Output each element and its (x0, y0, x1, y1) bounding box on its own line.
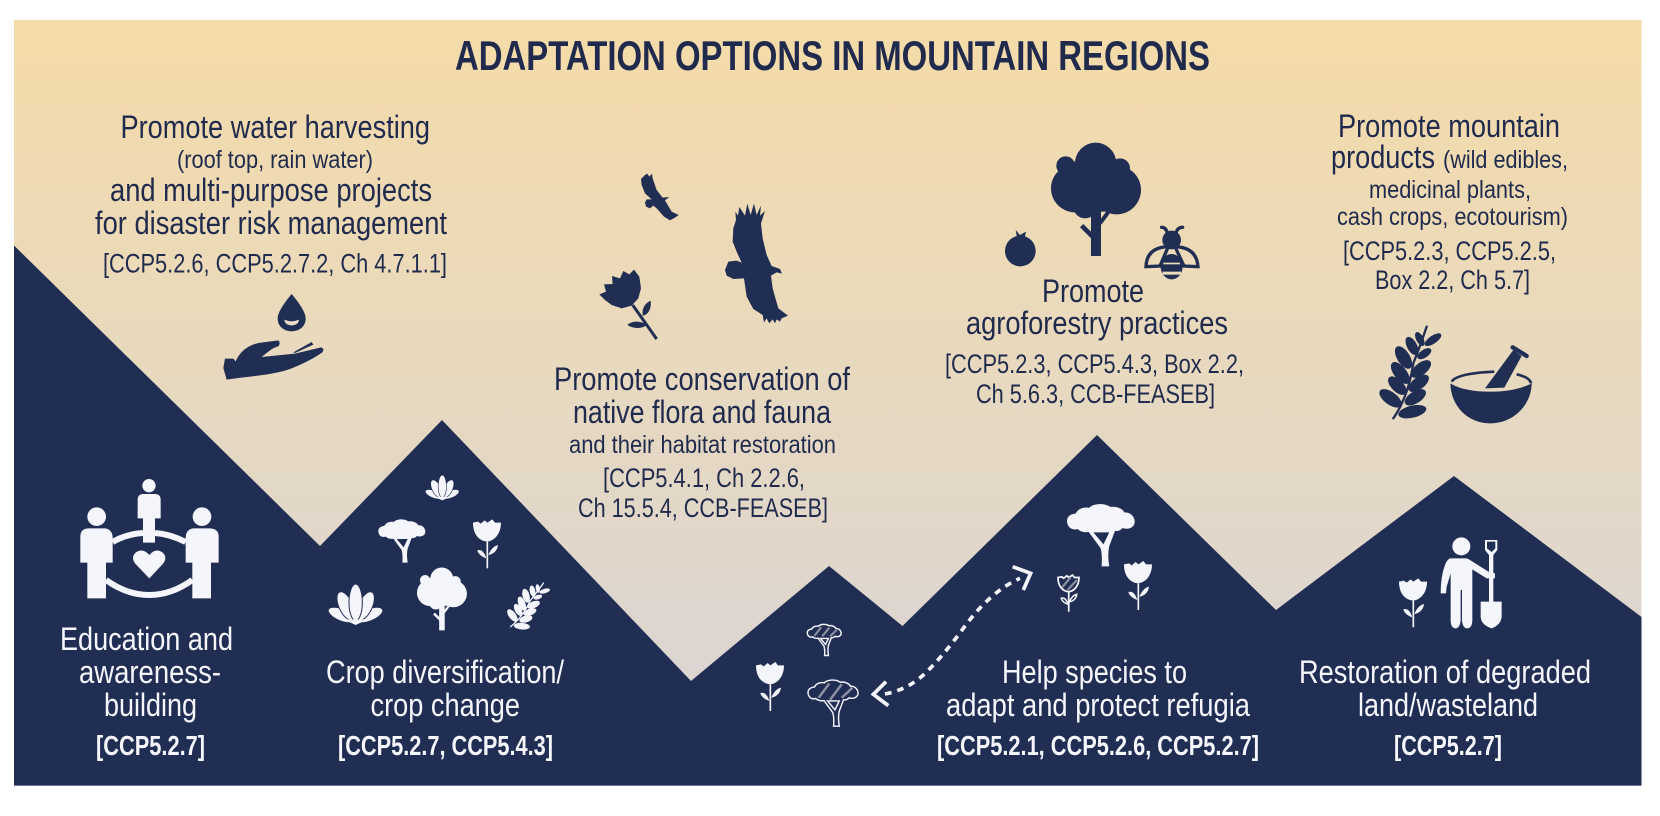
text block: education and awareness-building (60, 621, 233, 761)
text block: agroforestry practices: Promote (1042, 273, 1144, 309)
icon: flower, lower left (756, 662, 784, 711)
text block: mountain products: (wild edibles, (1443, 146, 1568, 174)
icon: herb branch and mortar with pestle (1376, 327, 1532, 423)
text block: water harvesting: Promote water harvesting (120, 109, 430, 145)
icon group: crop diversification plants (326, 475, 552, 636)
text block: mountain products: products (1331, 139, 1435, 175)
text block: mountain products: medicinal plants, (1369, 176, 1531, 204)
text block: mountain products: cash crops, ecotourism) (1337, 203, 1568, 231)
text block: help species adapt: [CCP5.2.1, CCP5.2.6, CCP5.2.7] (937, 730, 1259, 761)
text block: agroforestry practices: [CCP5.2.3, CCP5.4.3, Box 2.2, (945, 349, 1244, 379)
text block: crop diversification (326, 654, 564, 761)
icon: white flower, upper right (1124, 561, 1152, 610)
icon: white acacia (1067, 504, 1135, 566)
mountain silhouette (14, 246, 1642, 786)
text block: conservation of flora and fauna (554, 361, 850, 523)
text block: conservation of flora and fauna: and their habitat restoration (569, 431, 836, 459)
text block: crop diversification: Crop diversification/ (326, 654, 564, 690)
text block: conservation of flora and fauna: Ch 15.5.4, CCB-FEASEB] (578, 493, 828, 523)
text block: mountain products: Box 2.2, Ch 5.7] (1375, 265, 1530, 295)
text block: education and awareness-building: building (104, 687, 197, 723)
text block: water harvesting: and multi-purpose projects (110, 172, 432, 208)
arrow: dashed two-way arrow (873, 567, 1031, 706)
text block: water harvesting: [CCP5.2.6, CCP5.2.7.2, Ch 4.7.1.1] (103, 248, 447, 278)
text block: help species adapt: Help species to (1002, 654, 1187, 690)
icon: flower (473, 519, 501, 568)
text block: restoration of degraded land: land/wasteland (1358, 687, 1538, 723)
text block: education and awareness-building: awareness- (79, 654, 221, 690)
icon: small hatched acacia (807, 624, 841, 656)
text block: conservation of flora and fauna: Promote conservation of (554, 361, 850, 397)
title: ADAPTATION OPTIONS IN MOUNTAIN REGIONS (455, 32, 1210, 79)
text block: mountain products: Promote mountain (1338, 108, 1560, 144)
icon: large bush (326, 584, 385, 626)
text block: restoration of degraded land (1299, 654, 1591, 761)
icon: hand with water drop (223, 294, 323, 380)
icon: large hatched acacia (808, 680, 858, 726)
text block: water harvesting (95, 109, 447, 278)
text block: mountain products: [CCP5.2.3, CCP5.2.5, (1343, 236, 1556, 266)
text block: help species adapt: adapt and protect refugia (946, 687, 1250, 723)
icon: small eagle, large eagle and flower (599, 174, 788, 339)
text block: agroforestry practices: Ch 5.6.3, CCB-FEASEB] (976, 379, 1215, 409)
icon: round tree (417, 567, 467, 630)
icon: crop branch (501, 575, 552, 636)
text block: help species adapt (937, 654, 1259, 761)
text block: conservation of flora and fauna: native flora and fauna (573, 394, 831, 430)
icon: tree, fruit and bee (1005, 143, 1198, 279)
icon: acacia tree (378, 519, 425, 563)
text block: agroforestry practices: agroforestry practices (966, 305, 1228, 341)
text block: education and awareness-building: Education and (60, 621, 233, 657)
text block: water harvesting: for disaster risk management (95, 205, 447, 241)
text block: water harvesting: (roof top, rain water) (177, 146, 373, 174)
text block: education and awareness-building: [CCP5.2.7] (96, 730, 205, 761)
icon: person with shovel and flower (1399, 537, 1502, 628)
text block: restoration of degraded land: Restoration of degraded (1299, 654, 1591, 690)
text block: crop diversification: [CCP5.2.7, CCP5.4.3] (338, 730, 553, 761)
text block: mountain products (1331, 108, 1568, 295)
text block: conservation of flora and fauna: [CCP5.4.1, Ch 2.2.6, (603, 463, 805, 493)
icon: small hatched flower (1058, 575, 1079, 612)
text block: crop diversification: crop change (370, 687, 520, 723)
icon group: species moving to refugia (756, 504, 1152, 726)
icon: people around a heart (80, 479, 219, 598)
text block: agroforestry practices (945, 273, 1244, 409)
icon: small bush (424, 475, 460, 501)
text block: restoration of degraded land: [CCP5.2.7] (1394, 730, 1502, 761)
